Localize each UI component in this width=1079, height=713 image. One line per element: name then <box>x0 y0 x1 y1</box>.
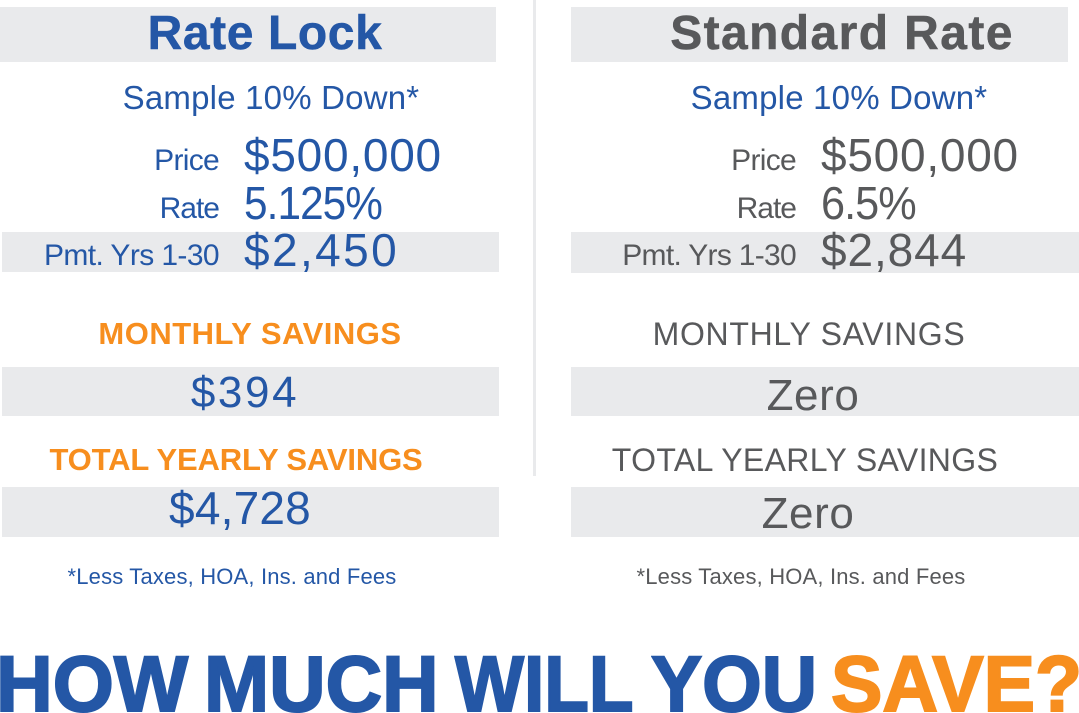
yearly savings value: $4,728 <box>169 482 311 534</box>
price row: $500,000 <box>821 129 1019 181</box>
sample down text: Sample 10% Down* <box>691 79 987 116</box>
rate row: 6.5% <box>821 177 916 229</box>
monthly savings value <box>571 367 1079 416</box>
monthly savings value: $394 <box>191 368 299 417</box>
footnote: *Less Taxes, HOA, Ins. and Fees <box>68 564 396 589</box>
standard rate heading <box>571 7 1068 62</box>
rate lock heading <box>0 7 496 62</box>
rate row: Rate <box>160 192 219 225</box>
payment row <box>571 232 1079 273</box>
footnote: *Less Taxes, HOA, Ins. and Fees <box>637 564 965 589</box>
payment row: Pmt. Yrs 1-30 <box>622 239 796 272</box>
monthly savings label: MONTHLY SAVINGS <box>653 316 965 352</box>
price row: $500,000 <box>244 129 442 181</box>
rate row: Rate <box>737 192 796 225</box>
price row: Price <box>731 144 796 177</box>
yearly savings value: Zero <box>762 489 854 538</box>
rate row <box>160 177 382 229</box>
price row <box>154 129 442 181</box>
yearly savings value <box>2 487 499 537</box>
standard rate heading: Standard Rate <box>670 7 1014 60</box>
payment row <box>2 232 499 272</box>
vertical divider <box>533 0 536 476</box>
yearly savings value <box>571 487 1079 537</box>
payment row: $2,844 <box>821 224 967 276</box>
rate row <box>737 177 916 229</box>
rate row: 5.125% <box>244 177 382 229</box>
panel: rate lock <box>0 7 499 589</box>
price row <box>731 129 1019 181</box>
payment row: Pmt. Yrs 1-30 <box>44 239 219 272</box>
panel: standard rate <box>571 7 1079 589</box>
sample down text: Sample 10% Down* <box>123 79 419 116</box>
monthly savings value: Zero <box>767 371 859 420</box>
payment row: $2,450 <box>244 224 399 276</box>
yearly savings label: TOTAL YEARLY SAVINGS <box>49 442 423 477</box>
monthly savings label: MONTHLY SAVINGS <box>98 316 402 351</box>
price row: Price <box>154 144 219 177</box>
yearly savings label: TOTAL YEARLY SAVINGS <box>612 442 998 478</box>
monthly savings value <box>2 367 499 416</box>
rate lock heading: Rate Lock <box>148 7 382 60</box>
title <box>0 639 1079 713</box>
